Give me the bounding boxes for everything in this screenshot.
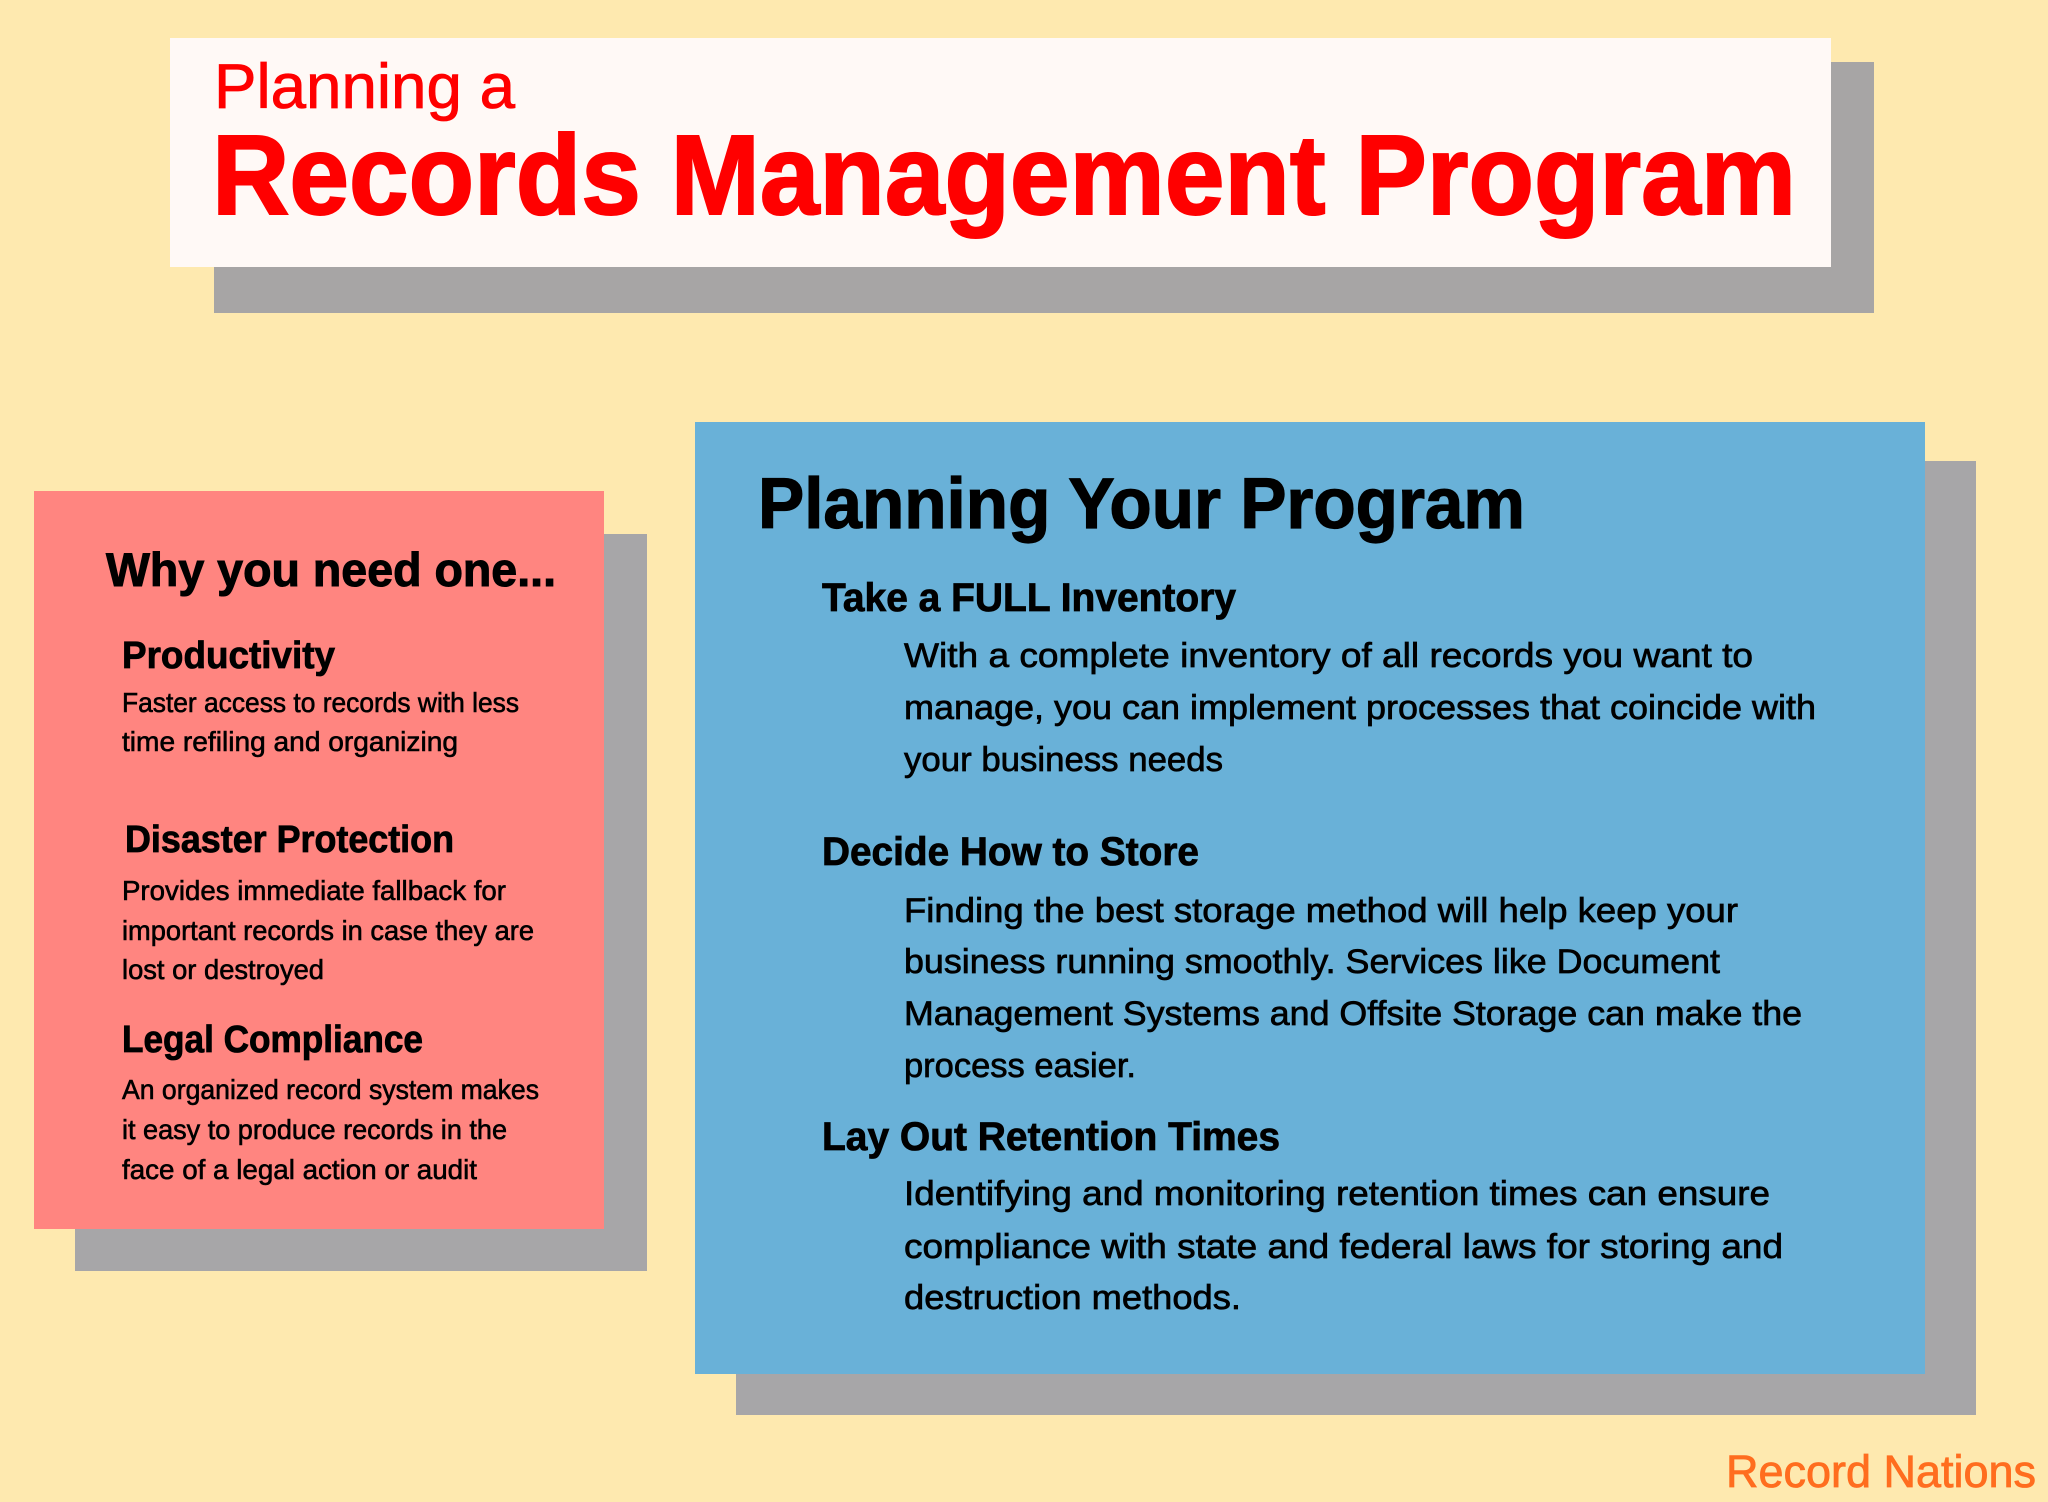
step: decide how to store: process easier. bbox=[904, 1047, 1136, 1085]
step: take a full inventory: manage, you can implement processes that coincide with bbox=[904, 689, 1816, 727]
step: take a full inventory bbox=[822, 576, 1816, 779]
reason: legal compliance: face of a legal action or audit bbox=[122, 1154, 477, 1185]
planning panel shadow bbox=[736, 461, 1976, 1415]
step: decide how to store: business running smoothly. Services like Document bbox=[904, 943, 1721, 981]
reason: legal compliance: An organized record system makes bbox=[122, 1074, 539, 1105]
reason: disaster protection: important records in case they are bbox=[122, 915, 534, 946]
reason: legal compliance: it easy to produce records in the bbox=[122, 1114, 507, 1145]
step: lay out retention times bbox=[822, 1115, 1783, 1317]
panel: why you need one bbox=[34, 491, 647, 1271]
why panel shadow bbox=[75, 534, 647, 1271]
step: lay out retention times: Lay Out Retention Times bbox=[822, 1115, 1280, 1159]
title: kicker: Planning a bbox=[214, 52, 516, 122]
reason: disaster protection: lost or destroyed bbox=[122, 954, 324, 985]
brand credit: Record Nations bbox=[1726, 1446, 2036, 1497]
title banner shadow bbox=[214, 62, 1874, 313]
why panel card bbox=[34, 491, 604, 1229]
reason: disaster protection bbox=[122, 819, 534, 985]
step: lay out retention times: Identifying and monitoring retention times can ensure bbox=[904, 1175, 1770, 1213]
step: lay out retention times: destruction methods. bbox=[904, 1279, 1241, 1317]
reason: productivity: Productivity bbox=[122, 635, 335, 677]
step: take a full inventory: your business needs bbox=[904, 741, 1223, 779]
reason: productivity bbox=[122, 635, 519, 757]
reason: productivity: time refiling and organizing bbox=[122, 726, 458, 757]
title banner card bbox=[170, 38, 1831, 267]
step: lay out retention times: compliance with state and federal laws for storing and bbox=[904, 1228, 1783, 1266]
planning panel heading: Planning Your Program bbox=[758, 465, 1525, 544]
why panel heading: Why you need one... bbox=[106, 543, 556, 596]
reason: disaster protection: Disaster Protection bbox=[125, 819, 454, 861]
step: take a full inventory: With a complete inventory of all records you want to bbox=[904, 637, 1753, 675]
panel: planning your program bbox=[695, 422, 1976, 1415]
step: decide how to store: Finding the best storage method will help keep your bbox=[904, 892, 1738, 930]
panel: title banner bbox=[170, 38, 1874, 313]
step: decide how to store: Decide How to Store bbox=[822, 830, 1199, 874]
title: main heading: Records Management Program bbox=[212, 112, 1796, 238]
reason: legal compliance bbox=[122, 1019, 539, 1185]
step: decide how to store bbox=[822, 830, 1802, 1085]
step: take a full inventory: Take a FULL Inventory bbox=[822, 576, 1237, 620]
reason: legal compliance: Legal Compliance bbox=[122, 1019, 423, 1061]
reason: disaster protection: Provides immediate fallback for bbox=[122, 875, 506, 906]
planning panel card bbox=[695, 422, 1925, 1374]
reason: productivity: Faster access to records with less bbox=[122, 687, 519, 718]
step: decide how to store: Management Systems and Offsite Storage can make the bbox=[904, 995, 1802, 1033]
